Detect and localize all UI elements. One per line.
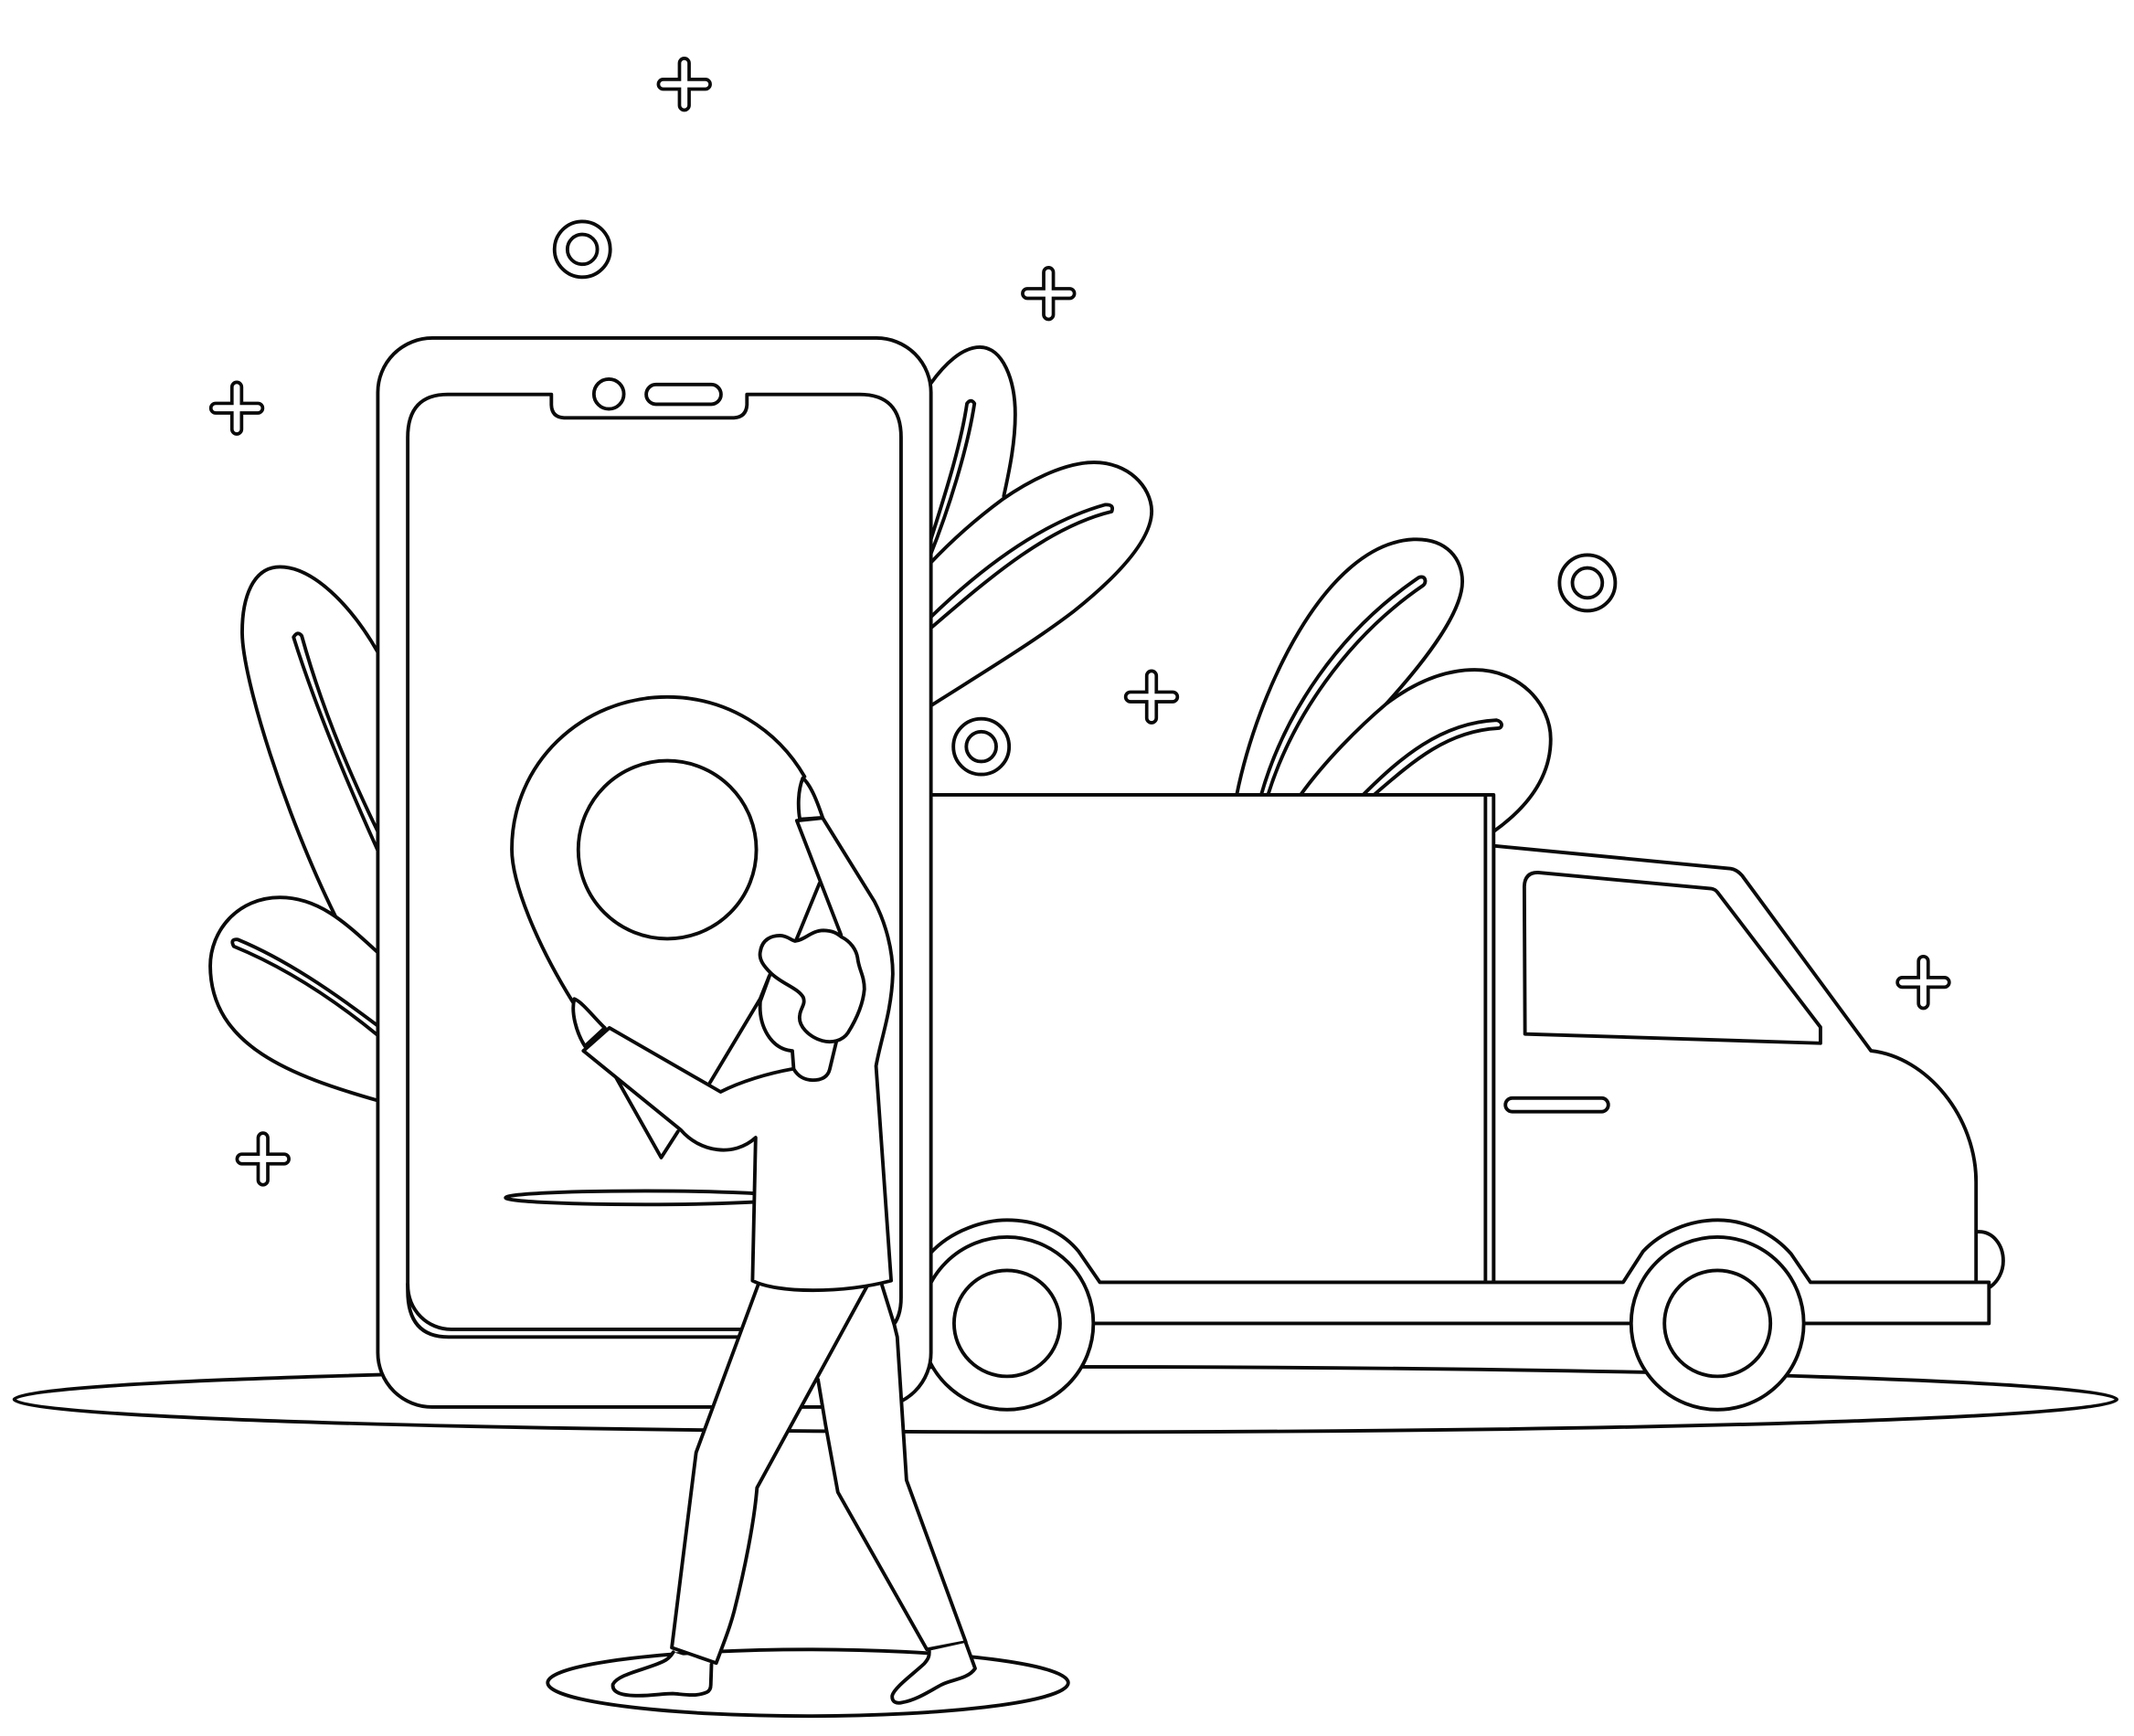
plus ornament left <box>216 387 258 429</box>
rear wheel <box>920 1237 1093 1410</box>
front leg <box>672 1286 866 1663</box>
phone screen with notch <box>408 395 901 1337</box>
truck cab <box>1493 846 1976 1283</box>
plus ornament upper right <box>1027 272 1069 314</box>
face and neck <box>760 973 836 1080</box>
phone body <box>377 338 931 1407</box>
ring ornament right <box>1559 555 1615 610</box>
pin shadow on screen <box>505 1191 786 1204</box>
person walking <box>573 778 975 1703</box>
hair <box>760 930 865 1042</box>
plus ornament top <box>664 63 706 105</box>
rear leg <box>818 1286 966 1649</box>
ground ellipse <box>15 1367 2117 1432</box>
plus ornament centre <box>1131 676 1173 718</box>
rear leg fill <box>818 1284 966 1649</box>
screen inner line <box>408 1284 870 1329</box>
truck chassis with wheel arches <box>929 1220 1989 1323</box>
lower hand <box>573 999 605 1046</box>
rear foot <box>892 1643 975 1703</box>
leaves behind truck <box>1237 539 1551 831</box>
leaves right of phone <box>929 347 1152 706</box>
leaves left of phone <box>210 566 377 1101</box>
foot shadow ellipse <box>547 1649 1068 1716</box>
ring ornament top left <box>555 221 610 277</box>
plus ornament lower left <box>242 1138 284 1180</box>
phone speaker <box>646 385 721 404</box>
bumper light <box>1978 1232 2003 1286</box>
door handle <box>1505 1098 1608 1112</box>
box side band <box>1484 795 1487 1283</box>
pin hole <box>579 761 757 938</box>
raised hand <box>799 778 823 820</box>
location pin <box>512 697 820 1158</box>
upper arm edge <box>583 1028 792 1092</box>
phone camera <box>594 379 624 409</box>
shirt and lower arm outline <box>583 818 893 1290</box>
ring ornament centre <box>953 719 1009 775</box>
cargo box <box>929 795 1493 1283</box>
pin head outline <box>512 697 804 1002</box>
smartphone <box>377 338 931 1407</box>
front foot <box>613 1652 711 1696</box>
delivery truck <box>920 795 2003 1410</box>
shirt fill <box>583 818 893 1290</box>
truck window <box>1524 873 1821 1043</box>
plus ornament far right <box>1902 961 1945 1003</box>
front wheel <box>1631 1237 1804 1410</box>
pin lower edges <box>616 884 820 1158</box>
